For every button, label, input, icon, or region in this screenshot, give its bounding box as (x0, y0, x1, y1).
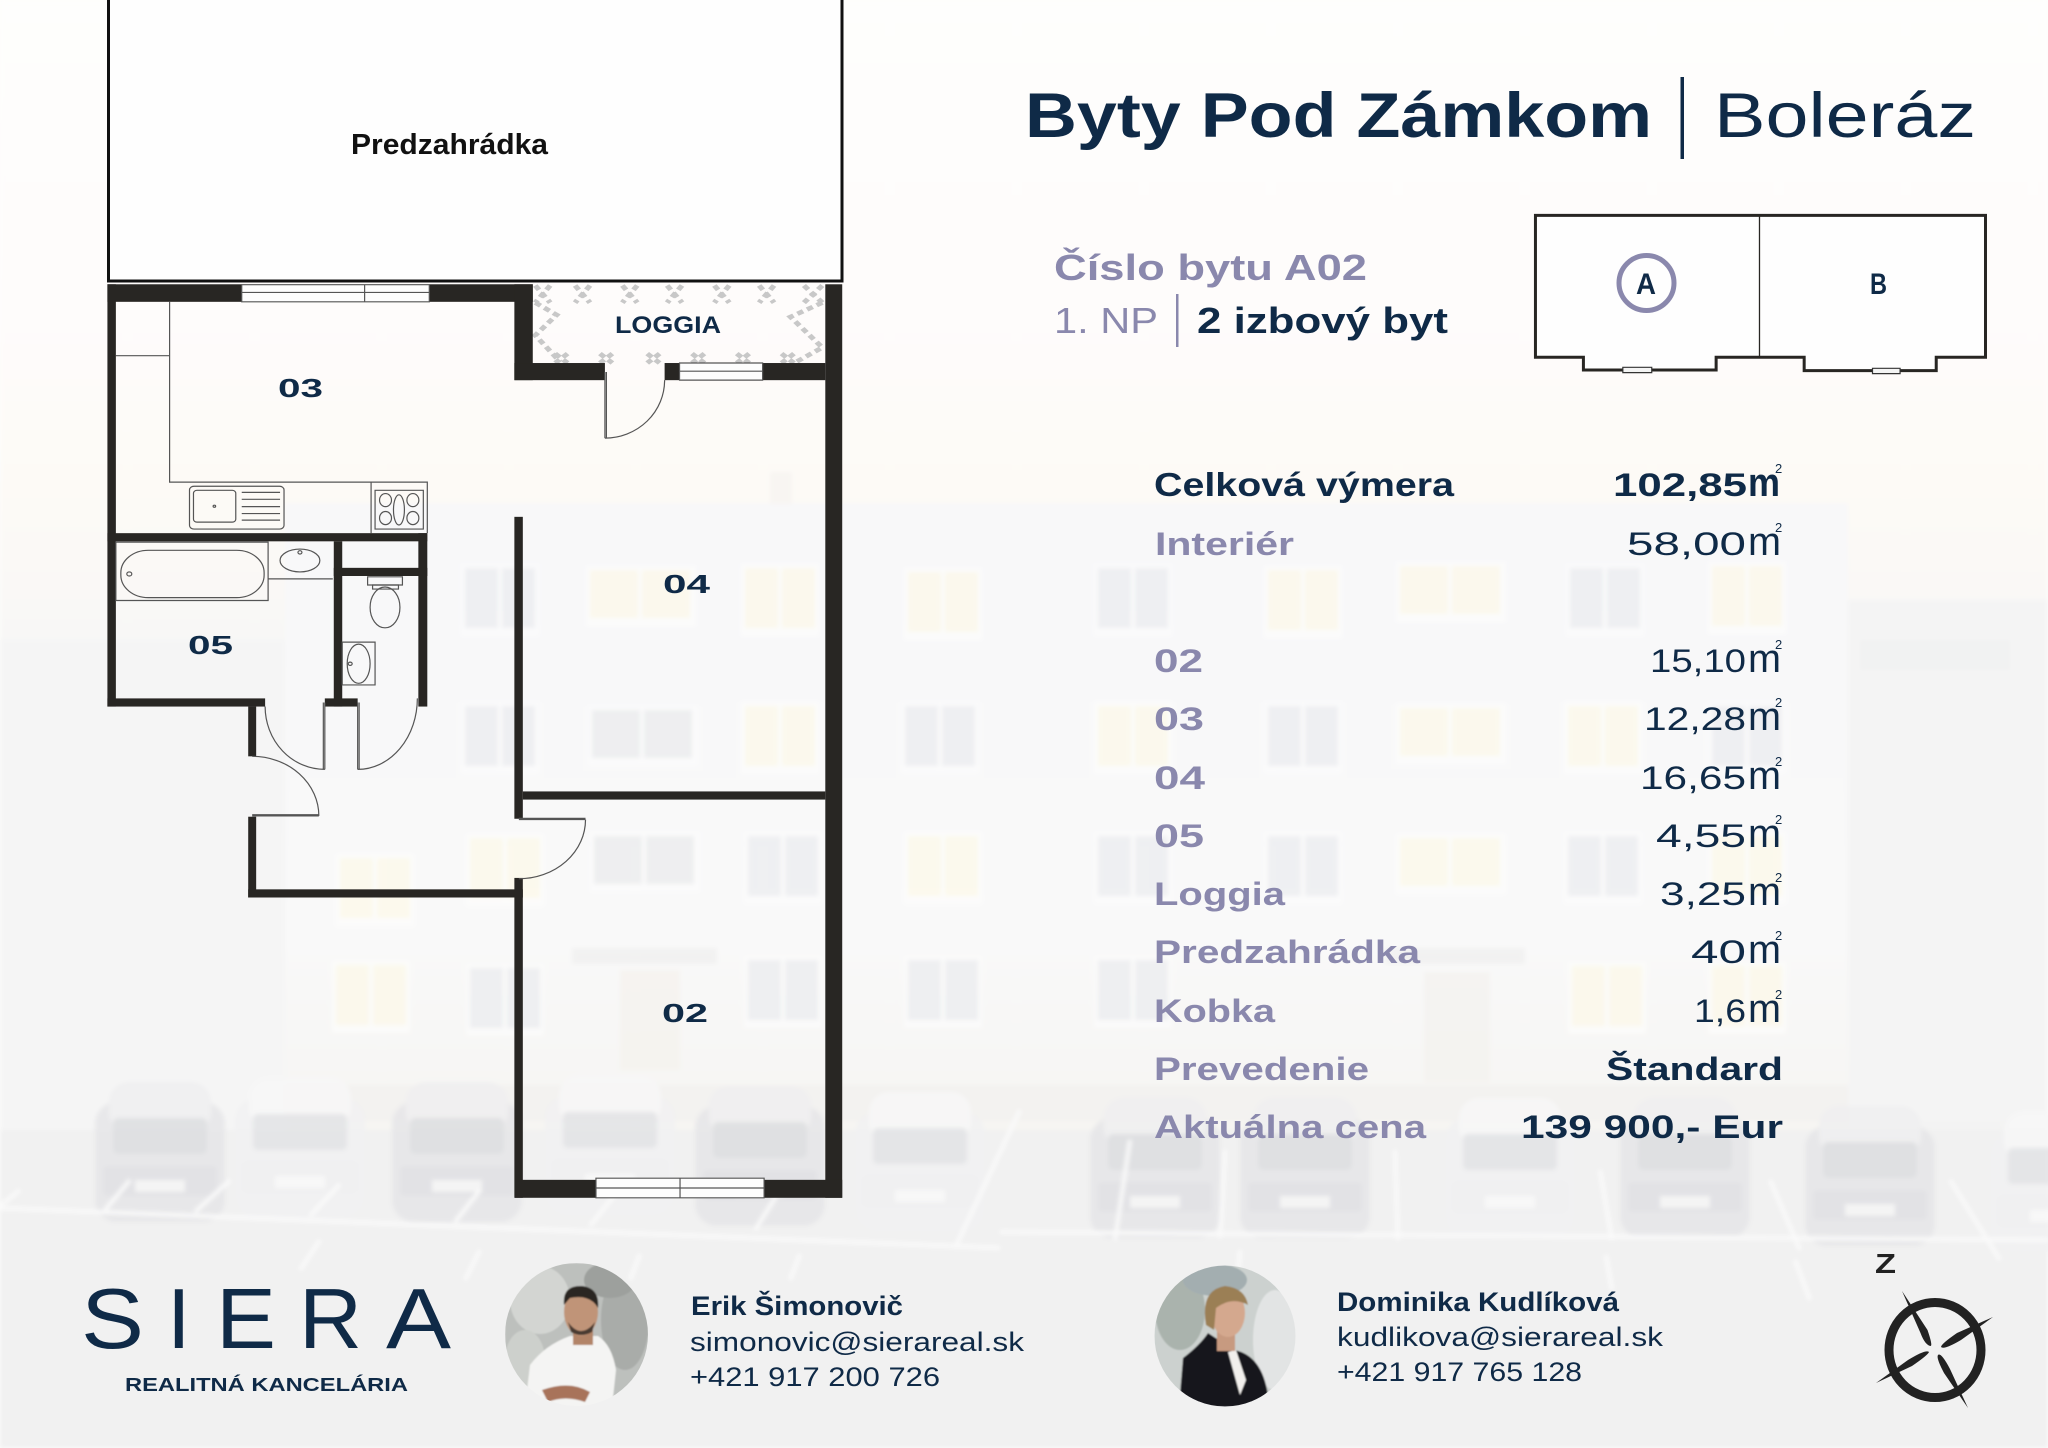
row: 03: 2 (1775, 695, 1782, 710)
walls (107, 284, 842, 1198)
row: 05: 2 (1775, 812, 1782, 827)
apartment number and type: Číslo bytu A02 (1054, 246, 1367, 288)
key plan of sections A and B (1535, 215, 1986, 374)
row: 03: 03 (1154, 701, 1204, 737)
contact: Erik Šimonovič: Erik Šimonovič (691, 1290, 903, 1321)
row: storage: m (1748, 987, 1781, 1031)
bathroom fixtures (116, 542, 402, 685)
row: total area: Celková výmera (1154, 466, 1455, 503)
row: front garden: Predzahrádka (1154, 934, 1420, 970)
contact: Dominika Kudlíková: Dominika Kudlíková (1337, 1287, 1620, 1317)
row: total area: 102,85 (1613, 467, 1747, 503)
logo: SIERA: A (386, 1272, 451, 1367)
floor plan (107, 0, 842, 1198)
logo: SIERA: S (81, 1272, 144, 1367)
row: 03: 12,28 (1644, 701, 1746, 737)
contact: Erik Šimonovič (690, 1290, 1025, 1392)
row: interior: m (1748, 520, 1781, 564)
room labels: 02 (662, 998, 708, 1028)
apartment walls and fixtures (107, 284, 842, 1198)
row: 04: 2 (1775, 754, 1782, 769)
row: loggia: 2 (1775, 870, 1782, 885)
logo: SIERA: E (216, 1272, 276, 1367)
row: finish standard: Štandard (1606, 1051, 1783, 1087)
row: interior: Interiér (1155, 526, 1294, 562)
room labels: 04 (663, 569, 711, 599)
row: 04: 04 (1154, 760, 1205, 796)
area and price table (1154, 461, 1783, 1145)
portrait: Dominika Kudlíková (1154, 1264, 1297, 1407)
row: 04: m (1748, 754, 1781, 798)
row: finish standard: Prevedenie (1154, 1051, 1369, 1087)
row: current price: Aktuálna cena (1154, 1109, 1426, 1145)
row: total area: 2 (1775, 461, 1782, 476)
logo: SIERA (81, 1272, 451, 1395)
row: interior (1155, 520, 1782, 564)
row: front garden (1154, 928, 1782, 972)
room labels: LOGGIA (615, 312, 721, 339)
contact: Dominika Kudlíková (1337, 1287, 1664, 1387)
contact: Erik Šimonovič: +421 917 200 726 (690, 1362, 940, 1392)
apartment number and type (1054, 246, 1448, 347)
title (1025, 77, 1976, 159)
row: front garden: m (1748, 928, 1781, 972)
loggia tile pattern (535, 286, 822, 363)
apartment number and type: 1. NP (1054, 300, 1158, 341)
portrait: Erik Šimonovič (505, 1262, 649, 1407)
contact: Erik Šimonovič: simonovic@sierareal.sk (690, 1327, 1025, 1357)
logo: SIERA: REALITNÁ KANCELÁRIA (125, 1374, 408, 1395)
title: Boleráz (1714, 81, 1976, 151)
row: 04: 16,65 (1640, 760, 1746, 796)
windows (242, 285, 764, 1198)
row: 03 (1154, 695, 1782, 739)
apartment number and type: 2 izbový byt (1197, 300, 1448, 341)
row: interior: 2 (1775, 520, 1782, 535)
doors (252, 372, 665, 879)
room labels: 03 (278, 373, 323, 403)
row: loggia (1154, 870, 1782, 914)
row: loggia: m (1748, 870, 1781, 914)
key plan of sections A and B: B (1870, 268, 1887, 301)
row: interior: 58,00 (1627, 526, 1746, 562)
contact: Dominika Kudlíková: kudlikova@sierareal.sk (1337, 1322, 1664, 1352)
key plan of sections A and B: A (1636, 268, 1656, 301)
front garden: Predzahrádka: Predzahrádka (351, 129, 549, 161)
contact: Dominika Kudlíková: +421 917 765 128 (1337, 1357, 1582, 1387)
front garden: Predzahrádka (108, 0, 842, 281)
row: storage: 1,6 (1694, 993, 1746, 1029)
row: storage (1154, 987, 1782, 1031)
compass: Z (1875, 1248, 1896, 1279)
row: finish standard (1154, 1051, 1783, 1087)
title: Byty Pod Zámkom (1025, 81, 1652, 151)
row: storage: 2 (1775, 987, 1782, 1002)
row: 02: m (1748, 637, 1781, 681)
row: storage: Kobka (1154, 993, 1275, 1029)
row: total area (1154, 461, 1782, 505)
room labels: 05 (188, 630, 233, 660)
logo: SIERA: R (299, 1272, 362, 1367)
row: 02: 15,10 (1650, 643, 1746, 679)
row: 03: m (1748, 695, 1781, 739)
row: 05 (1154, 812, 1782, 856)
row: 04 (1154, 754, 1782, 798)
room labels (188, 312, 721, 1028)
row: 02 (1154, 637, 1782, 681)
kitchen counters (116, 302, 427, 533)
row: 05: m (1748, 812, 1781, 856)
row: 05: 4,55 (1656, 818, 1746, 854)
row: loggia: 3,25 (1660, 876, 1746, 912)
logo: SIERA: I (167, 1272, 191, 1367)
row: front garden: 40 (1691, 934, 1746, 970)
row: front garden: 2 (1775, 928, 1782, 943)
row: current price: 139 900,- Eur (1521, 1109, 1783, 1145)
compass (1875, 1248, 1993, 1408)
row: loggia: Loggia (1154, 876, 1285, 912)
row: current price (1154, 1109, 1783, 1145)
row: 05: 05 (1154, 818, 1204, 854)
row: 02: 2 (1775, 637, 1782, 652)
row: total area: m (1748, 461, 1780, 505)
row: 02: 02 (1154, 643, 1203, 679)
